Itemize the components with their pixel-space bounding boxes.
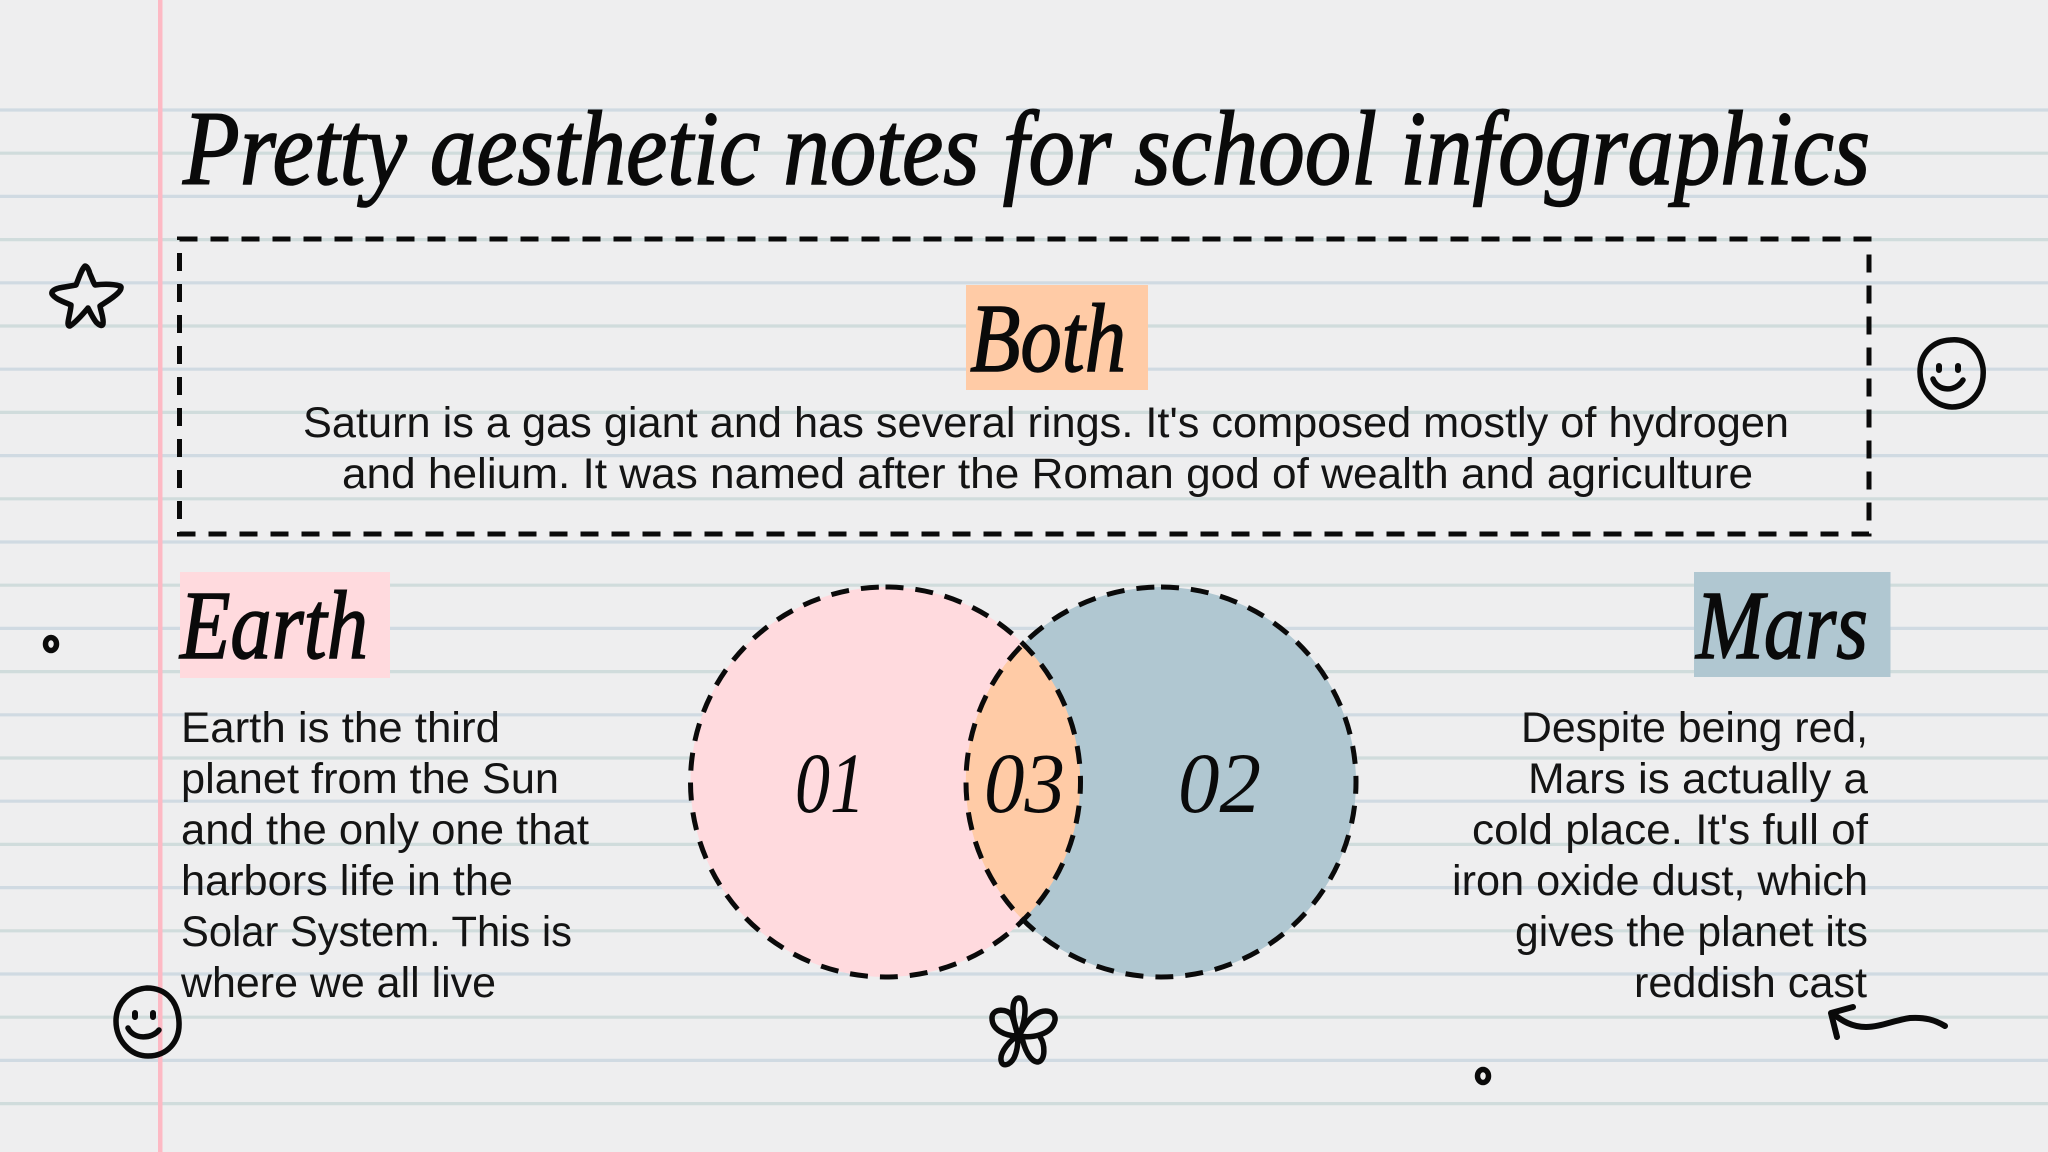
heading: earth: Earth: [178, 572, 368, 680]
venn diagram: [690, 587, 1356, 977]
text block: mars description: Despite being red,: [1521, 704, 1868, 752]
panel: both (dashed box): [180, 239, 1869, 534]
circle: mars: [966, 587, 1356, 977]
number 02: 02: [1178, 735, 1261, 831]
heading: mars: Mars: [1694, 572, 1868, 680]
number 03: 03: [984, 735, 1065, 831]
text block: earth description: Earth is the third: [181, 704, 500, 752]
text block: earth description: planet from the Sun: [181, 755, 559, 803]
icon: arrow: [1831, 1007, 1945, 1037]
text block: mars description: Mars is actually a: [1528, 755, 1868, 803]
text block: mars description: [1452, 704, 1869, 1007]
text block: both description: Saturn is a gas giant and has several rings. It's composed mostly of hydrogen: [303, 399, 1789, 447]
text block: earth description: [180, 704, 589, 1007]
panel: mars: [1452, 572, 1890, 1007]
text block: mars description: gives the planet its: [1515, 908, 1868, 956]
text block: both description: and helium. It was named after the Roman god of wealth and agriculture: [342, 450, 1753, 498]
overlap region: [966, 644, 1080, 920]
text block: both description: [303, 399, 1789, 498]
panel: earth: [178, 572, 589, 1007]
text block: earth description: harbors life in the: [181, 857, 513, 905]
text block: earth description: and the only one that: [181, 806, 589, 854]
heading highlight: both: [966, 285, 1148, 390]
circle: earth: [690, 587, 1080, 977]
icon: dot bottom: [1478, 1070, 1488, 1082]
icon: dot left: [46, 638, 56, 650]
heading: both: Both: [970, 285, 1126, 393]
text block: mars description: reddish cast: [1634, 959, 1867, 1007]
heading highlight: mars: [1694, 572, 1890, 677]
icon: smiley left: [116, 988, 179, 1056]
icon: smiley right: [1920, 340, 1983, 407]
heading highlight: earth: [180, 572, 390, 678]
text block: mars description: cold place. It's full of: [1472, 806, 1869, 854]
text block: earth description: Solar System. This is: [181, 908, 572, 956]
icon: star: [52, 266, 121, 326]
text block: mars description: iron oxide dust, which: [1452, 857, 1868, 905]
text block: earth description: where we all live: [180, 959, 496, 1007]
number 01: 01: [795, 735, 865, 831]
icon: flower: [992, 998, 1055, 1065]
